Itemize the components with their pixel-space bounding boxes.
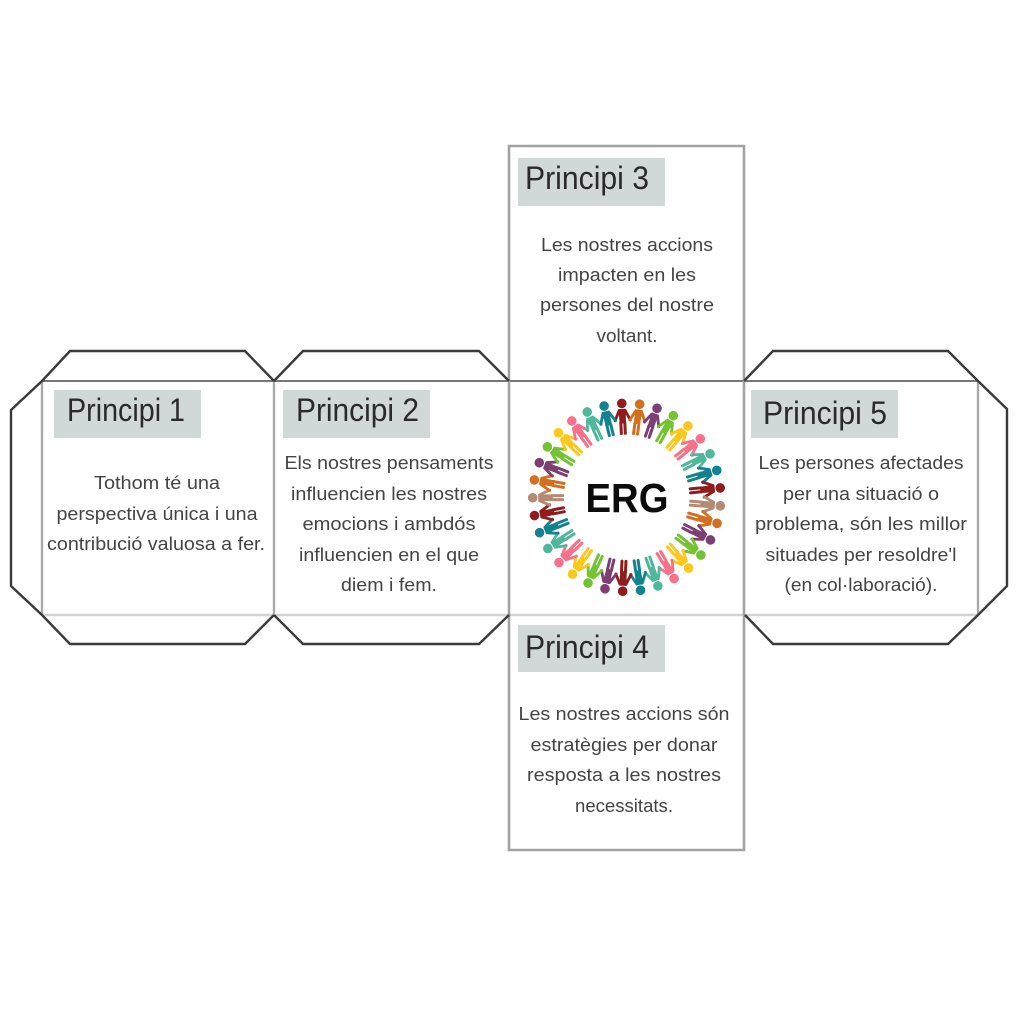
panel: Principi 4	[518, 625, 730, 816]
heading: Principi 2: Principi 2	[296, 392, 419, 428]
text: Principi 5	[755, 452, 967, 595]
text: Principi 3: impacten en les	[558, 264, 696, 285]
text: Principi 5: Les persones afectades	[758, 452, 964, 473]
text: Principi 1: Tothom té una	[94, 472, 221, 493]
logo text: ERG: ERG	[586, 475, 668, 521]
people ring	[528, 398, 726, 596]
text: Principi 1: perspectiva única i una	[56, 503, 258, 524]
text: Principi 4: resposta a les nostres	[527, 764, 721, 785]
text: Principi 2: influencien en el que	[299, 544, 479, 565]
text: Principi 2	[284, 452, 494, 595]
text: Principi 3: Les nostres accions	[541, 234, 713, 255]
cube net outline	[11, 146, 1007, 850]
text: Principi 5: per una situació o	[783, 483, 939, 504]
text: Principi 3: voltant.	[596, 325, 658, 346]
text: Principi 2: Els nostres pensaments	[284, 452, 494, 473]
text: Principi 1	[47, 472, 265, 554]
heading: Principi 3	[518, 158, 665, 206]
glue tabs	[11, 351, 1007, 644]
heading: Principi 4	[518, 625, 665, 672]
heading: Principi 5	[751, 390, 898, 438]
heading: Principi 1	[54, 390, 201, 438]
text: Principi 4: Les nostres accions són	[518, 703, 730, 724]
text: Principi 5: problema, són les millor	[755, 513, 967, 534]
heading: Principi 4: Principi 4	[525, 629, 649, 665]
text: Principi 5: situades per resoldre'l	[766, 544, 956, 565]
panel: Principi 1	[47, 390, 265, 554]
text: Principi 3: persones del nostre	[540, 294, 714, 315]
text: Principi 3	[540, 234, 714, 346]
text: Principi 4	[518, 703, 730, 816]
text: Principi 5: (en col·laboració).	[784, 574, 938, 595]
heading: Principi 2	[283, 390, 430, 438]
text: Principi 4: estratègies per donar	[530, 734, 718, 755]
panel: Principi 5	[751, 390, 967, 595]
heading: Principi 5: Principi 5	[763, 395, 887, 431]
heading: Principi 3: Principi 3	[525, 160, 649, 196]
text: Principi 2: diem i fem.	[341, 574, 437, 595]
panel: Principi 2	[283, 390, 494, 595]
text: Principi 2: influencien les nostres	[291, 483, 487, 504]
panel: ERG logo	[528, 398, 726, 596]
text: Principi 1: contribució valuosa a fer.	[47, 533, 265, 554]
fold lines	[42, 381, 978, 615]
panel: Principi 3	[518, 158, 714, 346]
text: Principi 2: emocions i ambdós	[302, 513, 476, 534]
text: Principi 4: necessitats.	[575, 795, 673, 816]
heading: Principi 1: Principi 1	[67, 392, 185, 428]
central cross column	[509, 146, 744, 850]
